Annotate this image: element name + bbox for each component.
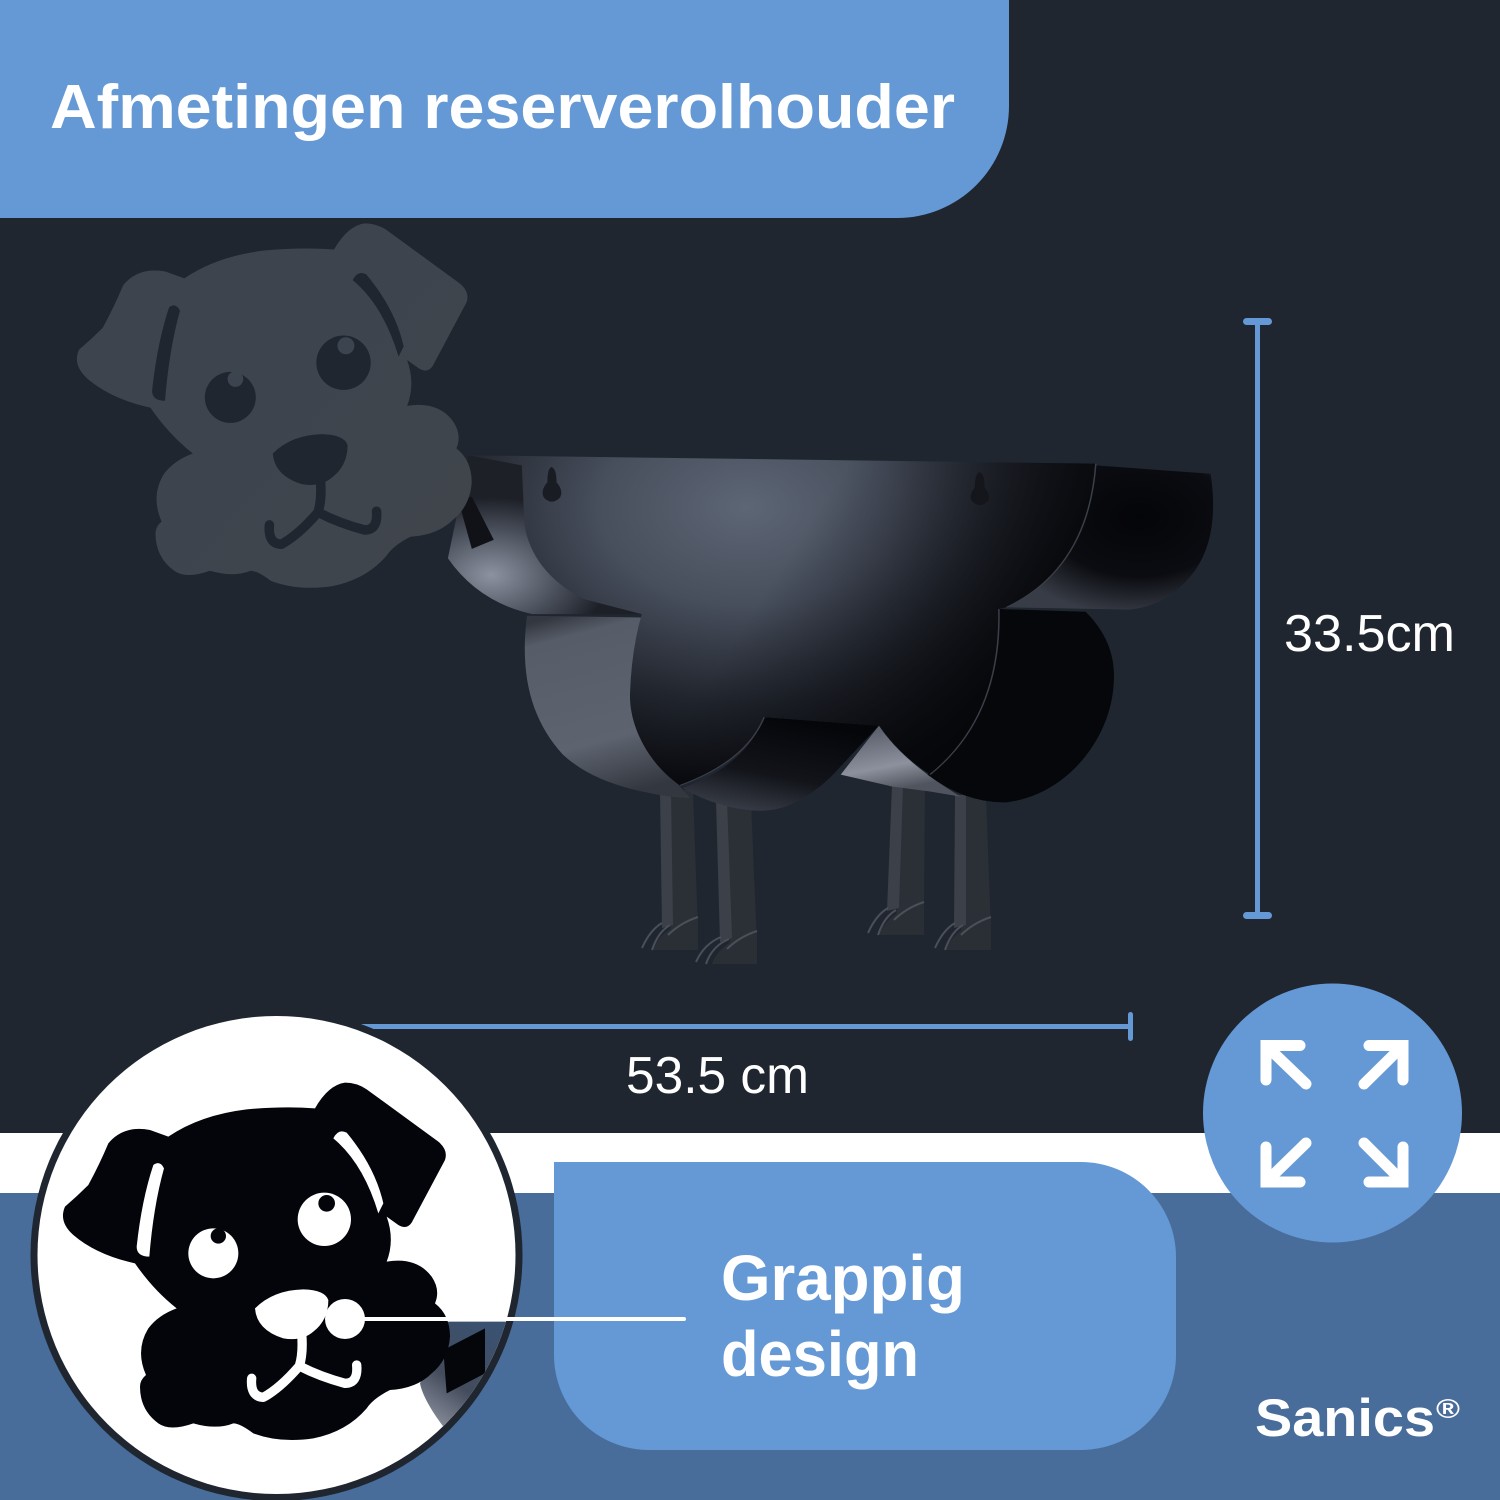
small dog head silhouette: [77, 223, 472, 588]
product photo: toilet roll holder: [448, 455, 1213, 964]
big dog head: [63, 1083, 450, 1440]
center trough: [683, 717, 879, 811]
keyhole right: [971, 472, 989, 505]
keyhole left: [543, 467, 561, 502]
holder body: [448, 455, 1213, 811]
legs and feet: [642, 785, 991, 964]
mounting clip: [458, 497, 494, 549]
white band: [0, 1133, 1500, 1193]
width label: 53.5 cm: [626, 1047, 809, 1105]
callout heading: design: [721, 1318, 919, 1390]
height label: 33.5cm: [1284, 605, 1455, 663]
callout marker and leader line: [325, 1299, 686, 1339]
brand logo: ®: [1436, 1394, 1460, 1424]
back triangle: [841, 726, 961, 797]
callout heading: Grappig: [721, 1242, 965, 1314]
bottom blue band: [0, 1193, 1500, 1500]
brand logo: Sanics: [1255, 1389, 1435, 1448]
callout heading: [721, 1242, 965, 1390]
left belly band: [525, 616, 690, 798]
right lower band: [927, 609, 1114, 802]
main back plate: [468, 455, 1096, 785]
callout panel: [554, 1162, 1176, 1450]
title: Afmetingen reserverolhouder: [50, 73, 955, 142]
header banner: [0, 0, 1009, 218]
horizontal dimension line: [360, 1012, 1133, 1041]
photo fragment in circle: [420, 1322, 506, 1426]
resize icon: [1203, 984, 1462, 1242]
left upper wing: [448, 455, 642, 614]
detail circle with dog close-up: [30, 1009, 522, 1500]
right upper wing: [1007, 465, 1213, 610]
vertical dimension line: [1243, 318, 1272, 919]
